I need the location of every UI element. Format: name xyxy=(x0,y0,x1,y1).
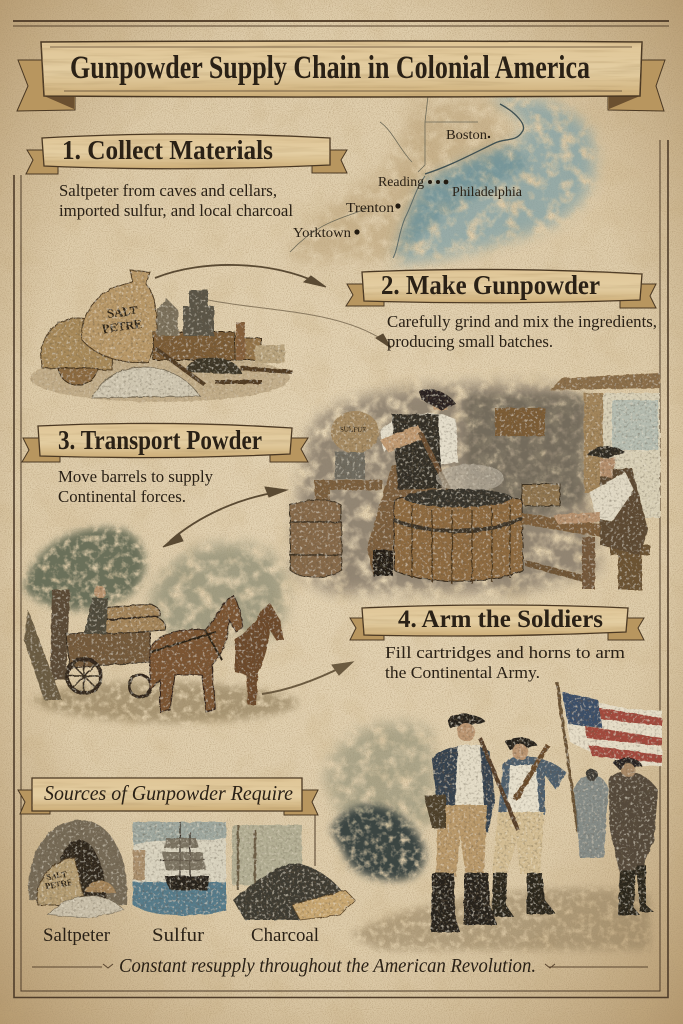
stool xyxy=(610,545,650,590)
arrow: materials to make gunpowder xyxy=(155,265,391,348)
footer note: Constant resupply throughout the American Revolution. xyxy=(119,955,536,977)
horse front xyxy=(150,596,243,712)
step 1 banner xyxy=(26,134,347,174)
illustration: raw materials: SALT xyxy=(106,303,138,321)
step 3 description xyxy=(58,467,213,506)
illustration: raw materials xyxy=(30,270,292,402)
vignette: saltpeter cave: SALT xyxy=(46,869,68,882)
step 2 description: producing small batches. xyxy=(387,332,553,351)
map city dots xyxy=(354,136,490,235)
map coastline and borders xyxy=(290,96,523,258)
cart xyxy=(66,630,150,668)
illustration: workshop: SULFUR xyxy=(340,426,367,434)
panel: step 1 collect materials xyxy=(26,134,347,402)
step 2 description: Carefully grind and mix the ingredients, xyxy=(387,312,657,331)
workshop wall xyxy=(292,384,600,592)
map labels: Trenton xyxy=(346,201,394,216)
step 2 banner xyxy=(346,269,656,308)
step 3 description: Move barrels to supply xyxy=(58,467,213,486)
driver xyxy=(84,598,108,634)
large saltpetre sack xyxy=(82,270,157,363)
window post and beam xyxy=(584,393,603,493)
illustration: raw materials: PETRE xyxy=(101,317,143,336)
step 4 description: Fill cartridges and horns to arm xyxy=(385,643,625,662)
vignette: sulfur ship xyxy=(133,822,226,915)
illustration: horse cart xyxy=(24,528,300,723)
sources heading: Sources of Gunpowder Require xyxy=(44,781,293,805)
step 1 description: Saltpeter from caves and cellars, xyxy=(59,181,277,200)
large mixing barrel xyxy=(394,492,523,581)
top double rule xyxy=(13,21,669,26)
tools xyxy=(155,348,292,385)
title ribbon tails xyxy=(17,60,665,111)
tool rack xyxy=(495,408,545,436)
back barrel xyxy=(522,484,560,506)
jars xyxy=(157,298,178,336)
step 2 description xyxy=(387,312,657,351)
map labels: Boston xyxy=(446,128,487,143)
illustration: workshop xyxy=(289,373,660,592)
jars on shelf xyxy=(335,452,365,479)
barrels on cart xyxy=(100,604,166,634)
step 1 banner: 1. Collect Materials xyxy=(62,135,273,165)
soldier 4 xyxy=(608,757,658,915)
sack xyxy=(41,318,112,370)
step 3 banner: 3. Transport Powder xyxy=(58,425,262,455)
right table xyxy=(522,513,606,538)
map land wash xyxy=(285,100,515,262)
smoke xyxy=(436,464,504,492)
crate xyxy=(153,332,235,360)
panel: sources of gunpowder xyxy=(18,778,355,946)
map: colonial coast with cities xyxy=(285,96,594,263)
left worker xyxy=(367,389,458,576)
map inshore water xyxy=(398,146,530,258)
soldier 3 xyxy=(574,775,608,858)
arrow: two-way transport xyxy=(163,487,287,547)
window xyxy=(603,393,660,518)
map water xyxy=(392,97,594,263)
map labels xyxy=(293,128,523,241)
background trees xyxy=(325,723,438,825)
source labels: Saltpeter xyxy=(43,925,111,946)
horse rear xyxy=(235,603,284,705)
panel: step 3 transport powder xyxy=(22,423,308,723)
sulfur sack xyxy=(331,411,379,453)
vignette: saltpeter cave: PETRE xyxy=(45,877,73,891)
cart wheels xyxy=(67,659,101,693)
panel: step 2 make gunpowder xyxy=(289,269,660,592)
charcoal heap xyxy=(184,357,242,374)
map labels: Reading xyxy=(378,175,424,190)
step 2 banner: 2. Make Gunpowder xyxy=(381,270,600,300)
left tree xyxy=(24,528,145,610)
soldiers xyxy=(424,714,658,932)
source labels xyxy=(43,925,319,946)
dark shrub xyxy=(331,805,425,880)
soldier 1 xyxy=(424,714,518,932)
map labels: Philadelphia xyxy=(452,185,523,200)
left table xyxy=(314,480,382,545)
vignette: saltpeter cave xyxy=(29,820,127,918)
vignette: charcoal heap xyxy=(232,825,355,920)
wooden bowl xyxy=(58,368,98,385)
sources banner xyxy=(18,778,318,815)
panel: step 4 arm the soldiers xyxy=(325,605,662,950)
small barrel xyxy=(290,500,342,578)
source labels: Charcoal xyxy=(251,925,319,946)
step 4 banner: 4. Arm the Soldiers xyxy=(398,606,603,633)
soldier 2 xyxy=(492,737,566,917)
step 4 description: the Continental Army. xyxy=(385,663,540,682)
arrow: transport to soldiers xyxy=(262,662,353,694)
map labels: Yorktown xyxy=(293,226,351,241)
step 1 description: imported sulfur, and local charcoal xyxy=(59,201,293,220)
step 4 description xyxy=(385,643,625,682)
background trees xyxy=(150,544,286,640)
saltpeter pile xyxy=(92,367,200,398)
right worker xyxy=(553,446,648,555)
illustration: soldiers and flag xyxy=(325,682,662,950)
step 3 description: Continental forces. xyxy=(58,487,186,506)
source labels: Sulfur xyxy=(152,925,205,946)
flag xyxy=(557,682,662,832)
step 4 banner xyxy=(350,605,644,640)
title banner xyxy=(17,41,665,111)
step 3 banner xyxy=(22,423,308,462)
step 1 description xyxy=(59,181,293,220)
